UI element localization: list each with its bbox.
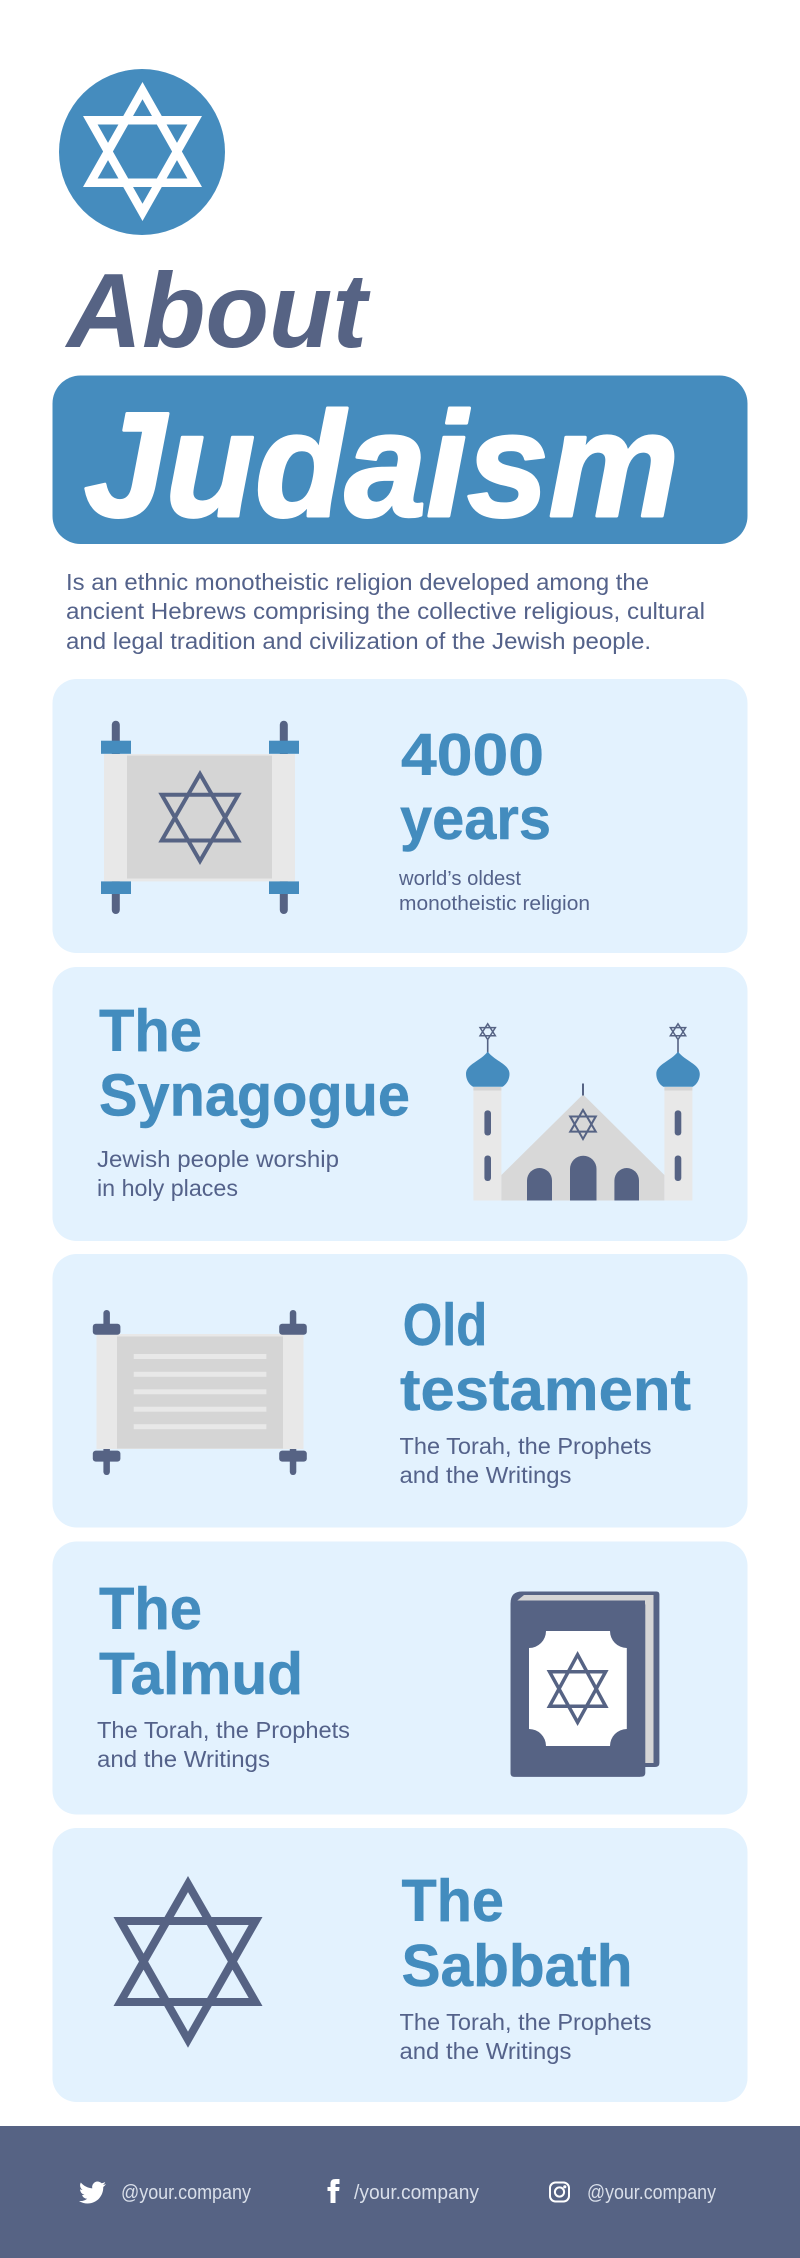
heading: Old testament: testament xyxy=(400,1357,691,1423)
heading: The Talmud: Talmud xyxy=(99,1641,303,1707)
heading: Old testament: Old xyxy=(403,1292,487,1358)
heading: Old testament xyxy=(400,1292,691,1423)
heading: The Sabbath: Sabbath xyxy=(402,1933,632,1999)
panel: The Synagogue xyxy=(52,967,748,1241)
icon: text scroll xyxy=(93,1310,307,1475)
text: The Torah: The Torah, the Prophets xyxy=(400,1433,652,1459)
text: facebook handle: /your.company xyxy=(354,2182,479,2204)
text: The Torah: The Torah, the Prophets xyxy=(400,2009,652,2035)
title banner: Judaism: Judaism xyxy=(84,381,679,548)
text: The Torah: and the Writings xyxy=(97,1746,270,1772)
panel: 4000 years xyxy=(52,679,748,953)
intro text xyxy=(66,569,705,654)
heading: 4000 years: 4000 xyxy=(401,722,544,788)
icon: star of David xyxy=(114,1876,262,2048)
footer xyxy=(0,2126,800,2258)
text: The Torah xyxy=(97,1717,350,1772)
text: The Torah xyxy=(400,1433,652,1488)
icon: scroll with star xyxy=(101,721,299,914)
title: About: About xyxy=(64,252,371,370)
text: The Torah: The Torah, the Prophets xyxy=(97,1717,350,1743)
intro text: ancient Hebrews comprising the collective religious, cultural xyxy=(66,598,705,624)
icon: star of David badge xyxy=(59,69,225,235)
heading: 4000 years: years xyxy=(400,786,551,852)
heading: The Synagogue: Synagogue xyxy=(99,1062,410,1128)
text: Jewish people worship: Jewish people worship xyxy=(97,1146,339,1172)
text: world's oldest xyxy=(398,867,590,915)
text: Jewish people worship xyxy=(97,1146,339,1201)
icon: instagram xyxy=(550,2182,569,2202)
heading: The Sabbath: The xyxy=(402,1868,504,1934)
panel: The Talmud xyxy=(52,1542,748,1814)
text: The Torah: and the Writings xyxy=(400,2038,572,2064)
panel: The Sabbath xyxy=(52,1828,748,2102)
icon: synagogue xyxy=(466,1022,700,1200)
text: Jewish people worship: in holy places xyxy=(97,1175,238,1201)
text: The Torah: and the Writings xyxy=(400,1462,572,1488)
heading: The Talmud xyxy=(99,1576,303,1707)
heading: The Talmud: The xyxy=(99,1576,202,1642)
icon: book with star xyxy=(511,1592,659,1777)
text: twitter handle: @your.company xyxy=(121,2182,251,2204)
icon: facebook xyxy=(328,2179,340,2203)
icon: twitter xyxy=(79,2182,106,2203)
text: The Torah xyxy=(400,2009,652,2064)
heading: 4000 years xyxy=(400,722,551,852)
heading: The Sabbath xyxy=(402,1868,632,1999)
text: world's oldest: monotheistic religion xyxy=(399,892,590,915)
heading: The Synagogue xyxy=(99,998,410,1128)
heading: The Synagogue: The xyxy=(99,998,202,1064)
intro text: and legal tradition and civilization of the Jewish people. xyxy=(66,628,651,654)
panel: Old testament xyxy=(52,1254,748,1528)
text: world's oldest: world’s oldest xyxy=(398,867,521,890)
intro text: Is an ethnic monotheistic religion developed among the xyxy=(66,569,649,595)
text: instagram handle: @your.company xyxy=(587,2182,716,2204)
